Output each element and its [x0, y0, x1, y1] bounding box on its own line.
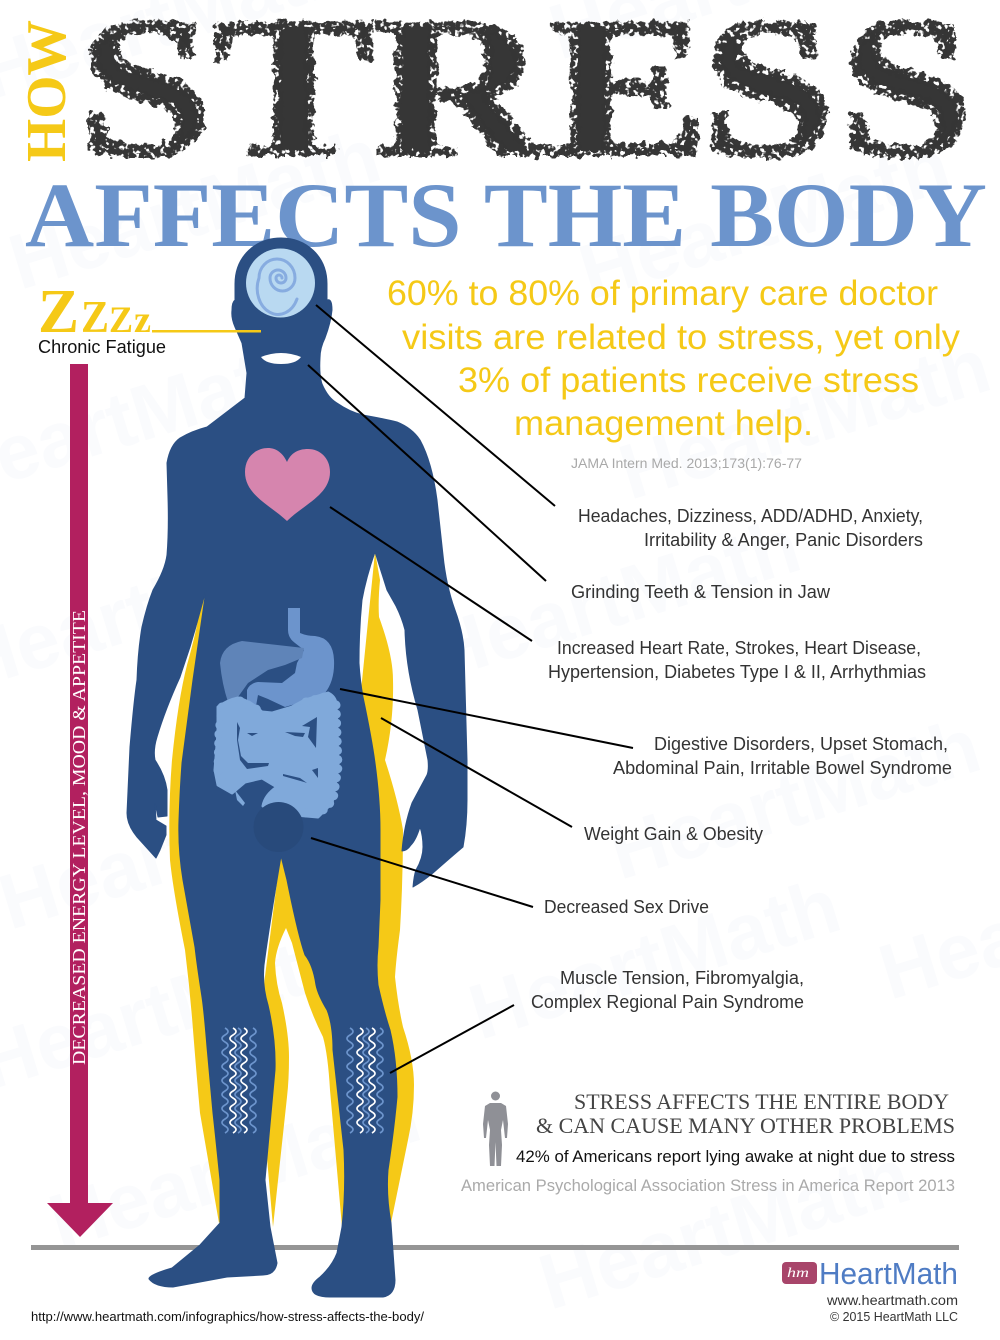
- insomnia statistic: 42% of Americans report lying awake at night due to stress: [516, 1147, 955, 1166]
- intestine gaps: [237, 717, 318, 783]
- digestive organs: [215, 608, 338, 852]
- effect: weight: Weight Gain & Obesity: [584, 824, 763, 844]
- effect: heart: [548, 638, 926, 682]
- muscle tension waves: right knee: [347, 1028, 383, 1133]
- effect: digestive: Abdominal Pain, Irritable Bowel Syndrome: [613, 758, 952, 778]
- effect: sex drive: Decreased Sex Drive: [544, 897, 709, 917]
- yellow weight outline: right side: [350, 552, 414, 1223]
- arrow shaft and head: [47, 364, 113, 1237]
- logo initials: hm: [787, 1266, 809, 1281]
- logo badge: [782, 1262, 817, 1284]
- arrow label: DECREASED ENERGY LEVEL, MOOD & APPETITE: [69, 610, 89, 1065]
- spiral: [257, 259, 297, 314]
- watermark pattern: HeartMath: [419, 501, 810, 696]
- headline statistic: 60% to 80% of primary care doctor: [387, 274, 938, 313]
- source URL: http://www.heartmath.com/infographics/how-stress-affects-the-body/: [31, 1310, 425, 1324]
- fatigue line: [152, 330, 261, 332]
- watermark pattern: HeartMath: [39, 1071, 430, 1266]
- summary heading: STRESS AFFECTS THE ENTIRE BODY: [574, 1089, 949, 1114]
- effect: muscle: Complex Regional Pain Syndrome: [531, 992, 804, 1012]
- summary heading: & CAN CAUSE MANY OTHER PROBLEMS: [536, 1113, 955, 1138]
- summary heading: [536, 1089, 955, 1138]
- brain disc: [246, 248, 315, 318]
- stomach: [247, 608, 334, 707]
- intestine bumps: [218, 696, 338, 813]
- title: HOW: HOW: [16, 20, 78, 162]
- watermark pattern: HeartMath: [569, 121, 960, 316]
- effect: digestive: Digestive Disorders, Upset Stomach,: [654, 734, 948, 754]
- headline statistic: visits are related to stress, yet only: [402, 318, 961, 357]
- watermark pattern: HeartMath: [529, 1131, 920, 1326]
- brain: [246, 248, 315, 318]
- fatigue label: Chronic Fatigue: [38, 337, 166, 357]
- muscle tension waves: left knee: [222, 1028, 256, 1133]
- watermark pattern: HeartMath: [0, 751, 380, 946]
- watermark pattern: HeartMath: [459, 861, 850, 1056]
- logo: HeartMath: [782, 1256, 958, 1291]
- effect: muscle: Muscle Tension, Fibromyalgia,: [560, 968, 804, 988]
- effect: headaches: [578, 506, 923, 550]
- blue silhouette: [127, 238, 467, 1297]
- heart: [245, 448, 330, 521]
- headline statistic: 3% of patients receive stress: [458, 361, 919, 400]
- Zzzz: z: [134, 299, 151, 341]
- Zzzz: Z: [109, 300, 133, 341]
- ground line: [31, 1245, 959, 1250]
- headline statistic: [387, 274, 961, 443]
- citation: JAMA Intern Med. 2013;173(1):76-77: [571, 456, 802, 471]
- yellow weight outline: inner legs: [262, 850, 346, 1227]
- Zzzz: [38, 278, 151, 346]
- copyright: © 2015 HeartMath LLC: [830, 1309, 958, 1324]
- effect: headaches: Headaches, Dizziness, ADD/ADHD, Anxiety,: [578, 506, 923, 526]
- website: www.heartmath.com: [826, 1292, 958, 1308]
- effect: heart: Increased Heart Rate, Strokes, Heart Disease,: [557, 638, 921, 658]
- leader lines: [308, 305, 633, 1073]
- chronic fatigue marker: [38, 278, 261, 357]
- watermark pattern: HeartMath: [599, 701, 990, 896]
- watermark pattern: HeartMath: [609, 321, 1000, 516]
- pelvis circle: [254, 802, 304, 852]
- intestine tail: [235, 790, 245, 806]
- effect: heart: Hypertension, Diabetes Type I & II, Arrhythmias: [548, 662, 926, 682]
- title: AFFECTS THE BODY: AFFECTS THE BODY: [25, 164, 987, 266]
- icon: small person: [483, 1092, 508, 1166]
- logo wordmark: HeartMath: [819, 1256, 958, 1291]
- effect: digestive: [613, 734, 952, 778]
- Zzzz: Z: [81, 292, 109, 342]
- yellow weight outline: left side: [169, 590, 235, 1223]
- Zzzz: Z: [38, 278, 79, 346]
- effect: muscle: [531, 968, 804, 1012]
- headline statistic: management help.: [514, 404, 813, 443]
- effect: headaches: Irritability & Anger, Panic Disorders: [644, 530, 923, 550]
- effect: jaw: Grinding Teeth & Tension in Jaw: [571, 582, 831, 602]
- liver: [220, 641, 304, 702]
- body figure: [127, 238, 467, 1297]
- jaw: [261, 353, 301, 364]
- watermark pattern: HeartMath: [0, 111, 390, 306]
- vertical arrow: decreased energy: [47, 364, 113, 1237]
- intestines: [215, 693, 338, 817]
- APA citation: American Psychological Association Stress in America Report 2013: [461, 1176, 955, 1195]
